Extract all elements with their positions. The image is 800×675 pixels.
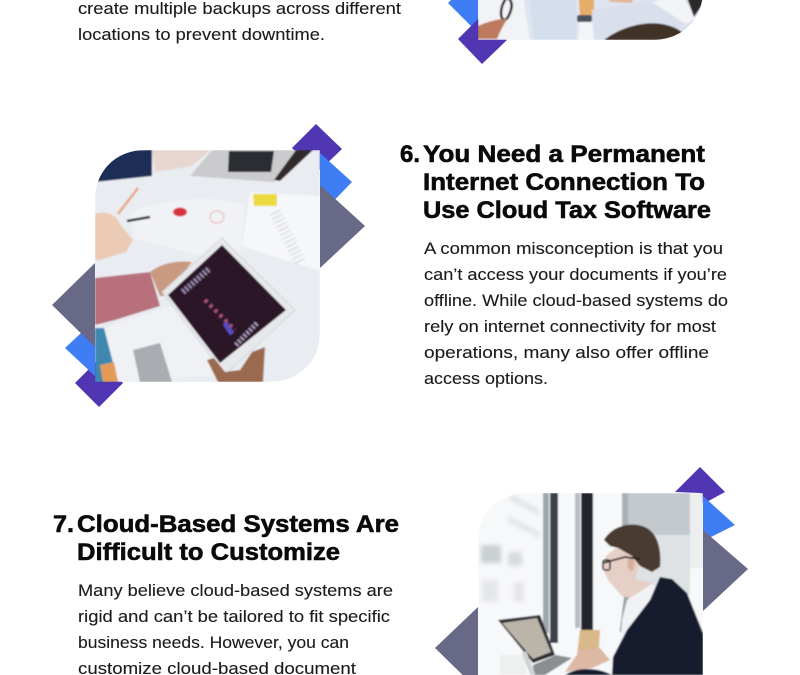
icon: purple diamond bottom [75,359,123,407]
icon: gray diamond right [703,530,748,611]
section 6 body text: offline. While cloud-based systems do [424,292,728,310]
section 7 heading: Cloud-Based Systems Are [77,511,399,538]
icon: blue diamond top [320,153,352,215]
section 5 image with diamonds [448,0,703,64]
icon: purple diamond top [292,124,342,170]
section 6 image with diamonds [52,124,365,407]
photo: tablet on desk [95,150,320,382]
section 6 heading: Internet Connection To [423,169,705,196]
icon: gray diamond right [320,185,365,268]
section 7 heading [53,511,399,566]
section 6 heading: You Need a Permanent [423,141,705,168]
icon: gray diamond left [52,263,95,347]
section 7 image with diamonds [435,467,748,675]
section 7 heading: 7. [53,511,74,538]
section 5 body text (continued): locations to prevent downtime. [78,26,325,44]
section 6 body text: can’t access your documents if you’re [424,266,727,284]
section 6 body text [424,240,728,388]
icon: gray diamond left [435,607,478,675]
section 7 body text [78,582,393,675]
section 7 body text: business needs. However, you can [78,634,349,652]
section 6 heading: Use Cloud Tax Software [423,197,711,224]
icon: blue diamond [703,496,735,541]
section 6 heading: 6. [400,141,420,168]
section 7 body text: Many believe cloud-based systems are [78,582,393,600]
section 7 body text: rigid and can’t be tailored to fit specific [78,608,390,626]
section 6 body text: access options. [424,370,548,388]
section 6 heading [400,141,711,224]
section 6 body text: rely on internet connectivity for most [424,318,716,336]
icon: blue diamond bottom [65,320,95,376]
section 7 heading: Difficult to Customize [77,539,340,566]
icon: purple diamond [675,467,725,504]
section 5 body text (continued) [78,0,401,44]
section 6 body text: A common misconception is that you [424,240,723,258]
section 6 body text: operations, many also offer offline [424,344,709,362]
photo: man at laptop [478,493,703,675]
section 5 body text (continued): create multiple backups across different [78,0,401,18]
